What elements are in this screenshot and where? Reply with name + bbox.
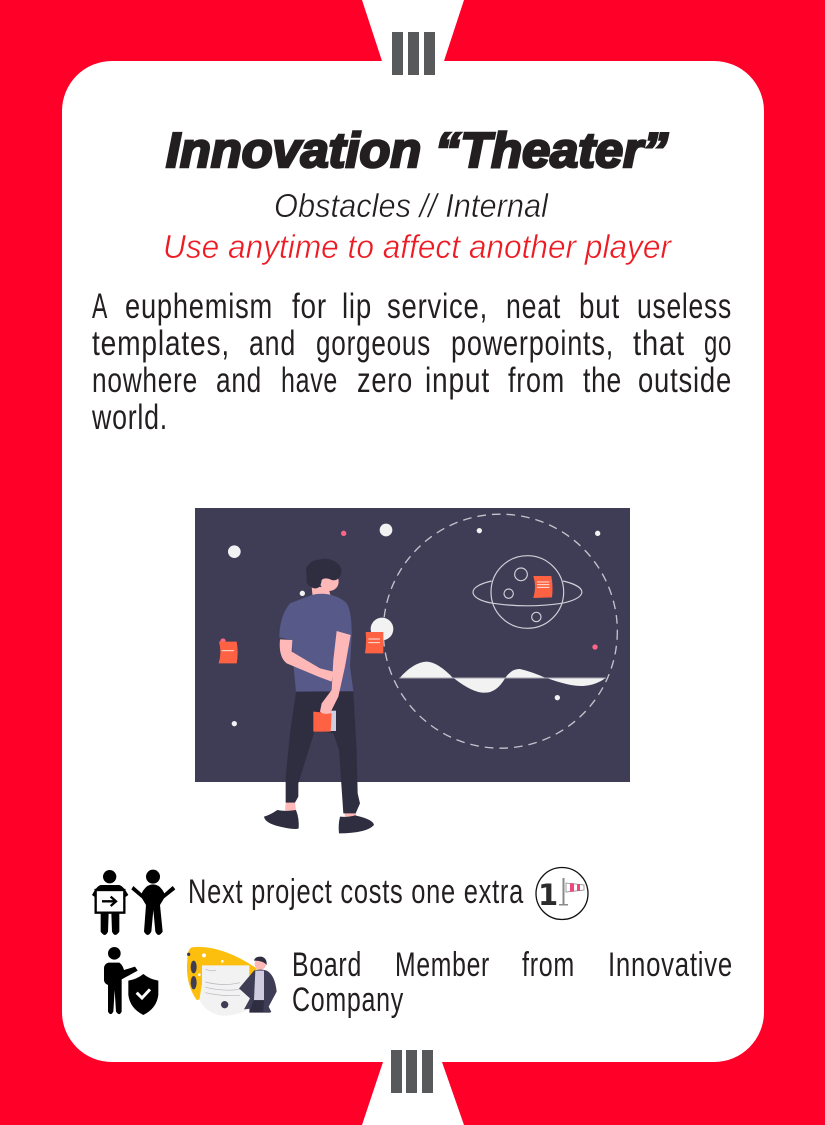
requirement text: Innovative [608, 946, 733, 984]
person and sticky notes [219, 524, 393, 833]
description text: for [292, 287, 327, 326]
usage instruction: Use anytime to affect another player [163, 228, 673, 265]
icon: cost token with windsock: 1 [538, 878, 558, 912]
description text: world. [91, 398, 168, 437]
requirement text: from [522, 946, 575, 984]
requirement icon: person with shield [104, 947, 158, 1015]
title: Innovation “Theater” [166, 124, 669, 178]
dashed circle and planet scene [383, 514, 617, 748]
description text: and [249, 324, 296, 363]
description text: the [583, 361, 622, 400]
illustration: person looking at space wall [195, 508, 630, 833]
description text: gorgeous [316, 324, 431, 363]
requirement text: Board [292, 946, 362, 984]
effect icon: two people exchanging a sign [92, 870, 175, 935]
description text: useless [637, 287, 732, 326]
requirement text: Member [395, 946, 490, 984]
description text: A [92, 287, 108, 326]
description text: neat [506, 287, 561, 326]
board member illustration [187, 947, 277, 1016]
category subtitle: Obstacles // Internal [274, 187, 550, 224]
description text: input [425, 361, 490, 400]
description text [91, 287, 732, 437]
requirement text [292, 946, 733, 1019]
description text: go [704, 324, 732, 363]
description text: euphemism [125, 287, 273, 326]
top level marker: three bars [392, 32, 435, 75]
description text: but [579, 287, 620, 326]
bottom level marker: three bars [391, 1050, 433, 1093]
description text: zero [357, 361, 413, 400]
description text: and [216, 361, 262, 400]
description text: templates, [92, 324, 230, 363]
description text: nowhere [92, 361, 198, 400]
description text: lip [342, 287, 372, 326]
requirement text: Company [292, 981, 404, 1019]
description text: service, [387, 287, 488, 326]
description text: have [281, 361, 338, 400]
description text: outside [638, 361, 732, 400]
description text: from [508, 361, 565, 400]
description text: that [633, 324, 685, 363]
description text: powerpoints, [451, 324, 614, 363]
icon: cost token with windsock [536, 868, 588, 920]
effect text: Next project costs one extra [188, 873, 524, 911]
